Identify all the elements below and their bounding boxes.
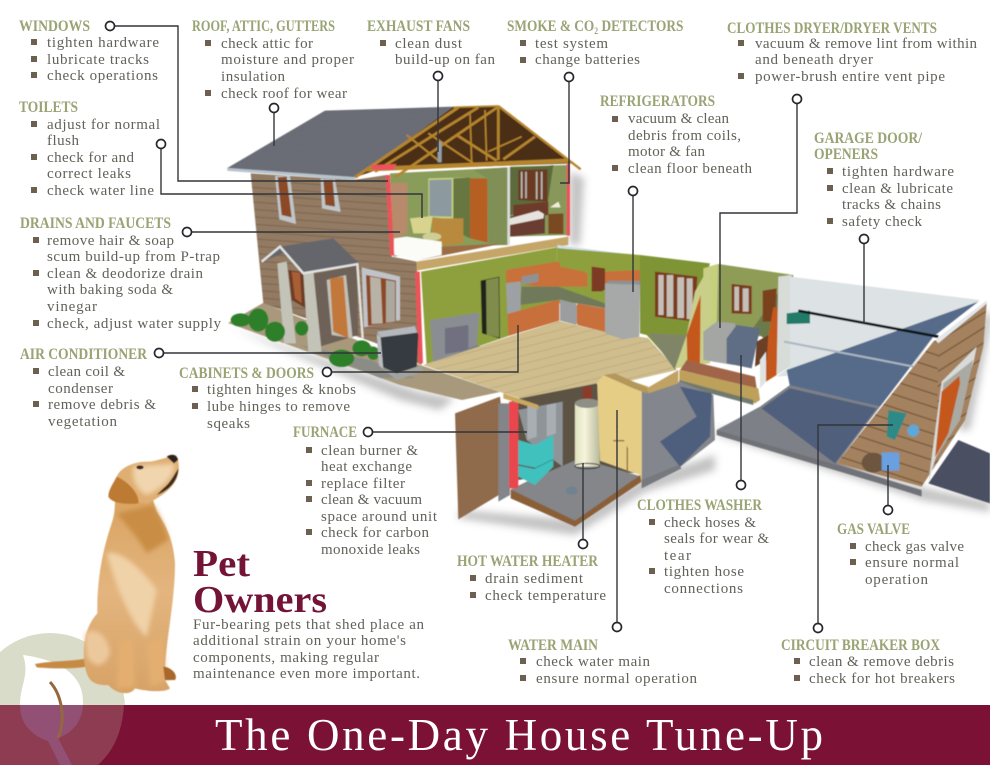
panel: air conditioner <box>20 346 156 430</box>
panel: gas valve: operation <box>865 572 928 588</box>
bathroom fixtures <box>432 218 463 247</box>
panel: refrigerators: vacuum & clean <box>628 111 730 127</box>
truss <box>355 106 581 177</box>
panel: toilets: correct leaks <box>47 166 131 182</box>
panel: drains and faucets: clean & deodorize drain <box>47 266 204 282</box>
panel: toilets: check water line <box>47 183 154 199</box>
garage walls <box>777 277 980 377</box>
basement <box>455 375 648 527</box>
panel: air conditioner: clean coil & <box>48 364 125 380</box>
panel: furnace: monoxide leaks <box>321 542 420 558</box>
banner leaf overlay <box>0 705 124 765</box>
panel: furnace: clean burner & <box>321 443 418 459</box>
panel: cabinets and doors: lube hinges to remove <box>207 399 350 415</box>
window <box>655 272 697 322</box>
panel: circuit breaker box: check for hot breakers <box>809 671 955 687</box>
breaker box <box>887 410 907 440</box>
panel: refrigerators <box>600 93 752 177</box>
shading <box>117 505 168 553</box>
right half, zoom coordinates <box>560 248 990 503</box>
panel: smoke and CO2 detectors: 2 <box>594 26 598 36</box>
panel: roof, attic, gutters: insulation <box>221 69 286 85</box>
upper and lower house, zoom coordinates <box>227 106 627 380</box>
panel: circuit breaker box: CIRCUIT BREAKER BOX <box>781 637 941 654</box>
panel: furnace <box>293 424 438 558</box>
furnace ducts <box>518 402 563 467</box>
kitchen edge <box>577 305 605 332</box>
pet owners paragraph: Fur-bearing pets that shed place an <box>193 617 424 633</box>
panel: clothes washer: tighten hose <box>664 564 744 580</box>
panel: windows: tighten hardware <box>47 35 159 51</box>
panel: toilets: check for and <box>47 150 134 166</box>
garage floor <box>717 385 922 497</box>
laundry walls <box>703 264 793 337</box>
panel: clothes washer: tear <box>664 548 691 564</box>
pet owners heading <box>193 543 327 621</box>
panel: garage door openers: GARAGE DOOR/ <box>814 130 923 147</box>
panel: windows <box>19 18 159 84</box>
title banner <box>0 682 990 765</box>
panel: clothes dryer and dryer vents <box>727 20 978 85</box>
panel: garage door openers: tracks & chains <box>842 197 941 213</box>
cut walls <box>386 175 394 256</box>
panel: garage door openers: OPENERS <box>814 146 878 163</box>
panel: clothes dryer and dryer vents: CLOTHES DRYER/DRYER VENTS <box>727 20 937 37</box>
fireplace <box>430 313 479 363</box>
panel: water main: check water main <box>536 654 650 670</box>
panel: toilets: TOILETS <box>19 99 78 116</box>
panel: roof, attic, gutters <box>192 18 354 102</box>
pet owners paragraph: maintenance even more important. <box>193 666 420 682</box>
panel: circuit breaker box: clean & remove debris <box>809 654 954 670</box>
basement floor <box>511 458 642 526</box>
panel: hot water heater <box>457 553 606 604</box>
panel: exhaust fans: EXHAUST FANS <box>367 18 470 35</box>
roof <box>227 107 453 177</box>
upper room walls <box>390 167 508 257</box>
wall behind <box>597 385 642 475</box>
wood floor <box>423 321 677 404</box>
panel: cabinets and doors: CABINETS & DOORS <box>179 365 314 382</box>
body <box>84 490 175 693</box>
panel: garage door openers: safety check <box>842 214 922 230</box>
panel: hot water heater: drain sediment <box>485 571 584 587</box>
front window upper <box>275 176 296 224</box>
leader lines and markers <box>106 22 893 632</box>
panel: clothes dryer and dryer vents: power-brush entire vent pipe <box>755 69 945 85</box>
panel: clothes dryer and dryer vents: and beneath dryer <box>755 52 873 68</box>
leaf emblem <box>0 633 125 765</box>
orange cut walls <box>675 265 710 368</box>
panel: drains and faucets: with baking soda & <box>47 282 173 298</box>
air conditioner <box>377 326 418 373</box>
garage door opener <box>787 311 810 324</box>
panel: garage door openers: clean & lubricate <box>842 181 953 197</box>
bedroom window and bed <box>518 169 547 202</box>
panel: gas valve: ensure normal <box>865 555 959 571</box>
siding side wall <box>837 335 943 487</box>
panel: hot water heater: HOT WATER HEATER <box>457 553 599 570</box>
panel: furnace: space around unit <box>321 509 438 525</box>
water heater <box>583 387 592 403</box>
pet owners paragraph: components, making regular <box>193 650 379 666</box>
washer and dryer <box>703 322 735 365</box>
pet owners paragraph: additional strain on your home's <box>193 633 406 649</box>
dog photo illustration <box>35 455 179 693</box>
panel: smoke and CO2 detectors: DETECTORS <box>598 18 683 35</box>
title banner: The One-Day House Tune-Up <box>215 710 823 760</box>
panel: furnace: FURNACE <box>293 424 357 441</box>
panel: smoke and CO2 detectors: test system <box>535 36 608 52</box>
panel: clothes washer: CLOTHES WASHER <box>637 497 763 514</box>
panel: air conditioner: vegetation <box>48 414 118 430</box>
panel: gas valve <box>837 521 964 588</box>
panel: furnace: clean & vacuum <box>321 492 422 508</box>
panel: drains and faucets <box>20 215 222 332</box>
bushes <box>231 308 379 367</box>
panel: windows: WINDOWS <box>19 18 90 35</box>
panel: gas valve: check gas valve <box>865 539 964 555</box>
panel: water main: WATER MAIN <box>508 637 598 654</box>
panel: air conditioner: condenser <box>48 381 113 397</box>
lower room walls <box>421 247 557 364</box>
gas meter <box>862 453 885 473</box>
panel: refrigerators: REFRIGERATORS <box>600 93 715 110</box>
pet owners paragraph <box>193 617 424 682</box>
panel: smoke and CO2 detectors: SMOKE & CO <box>507 18 594 35</box>
panel: cabinets and doors: sqeaks <box>207 416 250 432</box>
porch <box>288 270 306 308</box>
ground strip <box>228 303 500 400</box>
panel: clothes washer <box>637 497 769 597</box>
panel: clothes dryer and dryer vents: vacuum & remove lint from within <box>755 36 978 52</box>
panel: water main <box>508 637 698 687</box>
pet owners heading: Pet <box>193 543 250 585</box>
panel: garage door openers <box>814 130 954 230</box>
panel: furnace: check for carbon <box>321 525 430 541</box>
drop shadows <box>232 172 990 535</box>
concrete pier <box>642 382 715 485</box>
panel: drains and faucets: vinegar <box>47 299 97 315</box>
garage door <box>928 347 977 483</box>
driveway <box>928 440 990 503</box>
panel: smoke and CO2 detectors <box>507 18 683 68</box>
panel: garage door openers: tighten hardware <box>842 164 954 180</box>
panel: roof, attic, gutters: moisture and proper <box>221 52 354 68</box>
panel: roof, attic, gutters: ROOF, ATTIC, GUTTERS <box>192 18 335 35</box>
panel: furnace: heat exchange <box>321 459 412 475</box>
doorway <box>481 277 500 338</box>
house cutaway illustration <box>227 106 990 535</box>
attic <box>355 106 573 177</box>
panel: refrigerators: debris from coils, <box>628 128 741 144</box>
second floor slab <box>417 237 568 271</box>
panel: windows: lubricate tracks <box>47 52 149 68</box>
exterior siding <box>251 173 422 365</box>
kitchen cabinets <box>506 262 588 287</box>
fridge <box>605 283 640 339</box>
panel: toilets <box>19 99 160 199</box>
head <box>117 455 179 504</box>
panel: clothes washer: seals for wear & <box>664 531 769 547</box>
panel: roof, attic, gutters: check attic for <box>221 36 313 52</box>
panel: toilets: flush <box>47 133 80 149</box>
panel: cabinets and doors <box>179 365 356 432</box>
panel: drains and faucets: DRAINS AND FAUCETS <box>20 215 171 232</box>
panel: drains and faucets: scum build-up from P-trap <box>47 249 220 265</box>
panel: circuit breaker box <box>781 637 955 687</box>
panel: exhaust fans <box>367 18 496 68</box>
kitchen wing wall <box>640 255 710 368</box>
panel: clothes washer: check hoses & <box>664 515 756 531</box>
panel: gas valve: GAS VALVE <box>837 521 910 538</box>
furnace <box>518 435 553 485</box>
panel: furnace: replace filter <box>321 476 405 492</box>
panel: exhaust fans: build-up on fan <box>395 52 496 68</box>
panel: refrigerators: clean floor beneath <box>628 161 752 177</box>
panel: hot water heater: check temperature <box>485 588 606 604</box>
panel: exhaust fans: clean dust <box>395 36 463 52</box>
panel: roof, attic, gutters: check roof for wear <box>221 86 347 102</box>
panel: refrigerators: motor & fan <box>628 144 706 160</box>
panel: cabinets and doors: tighten hinges & knobs <box>207 382 356 398</box>
ear <box>108 477 139 504</box>
panel: toilets: adjust for normal <box>47 117 160 133</box>
panel: air conditioner: remove debris & <box>48 397 156 413</box>
joists <box>603 375 648 393</box>
panel: windows: check operations <box>47 68 158 84</box>
panel: water main: ensure normal operation <box>536 671 698 687</box>
panel: drains and faucets: remove hair & soap <box>47 233 174 249</box>
pet owners heading: Owners <box>193 579 327 621</box>
panel: smoke and CO2 detectors: change batteries <box>535 52 640 68</box>
panel: air conditioner: AIR CONDITIONER <box>20 346 148 363</box>
panel: clothes washer: connections <box>664 581 743 597</box>
tail <box>35 658 88 668</box>
panel: drains and faucets: check, adjust water supply <box>47 316 222 332</box>
